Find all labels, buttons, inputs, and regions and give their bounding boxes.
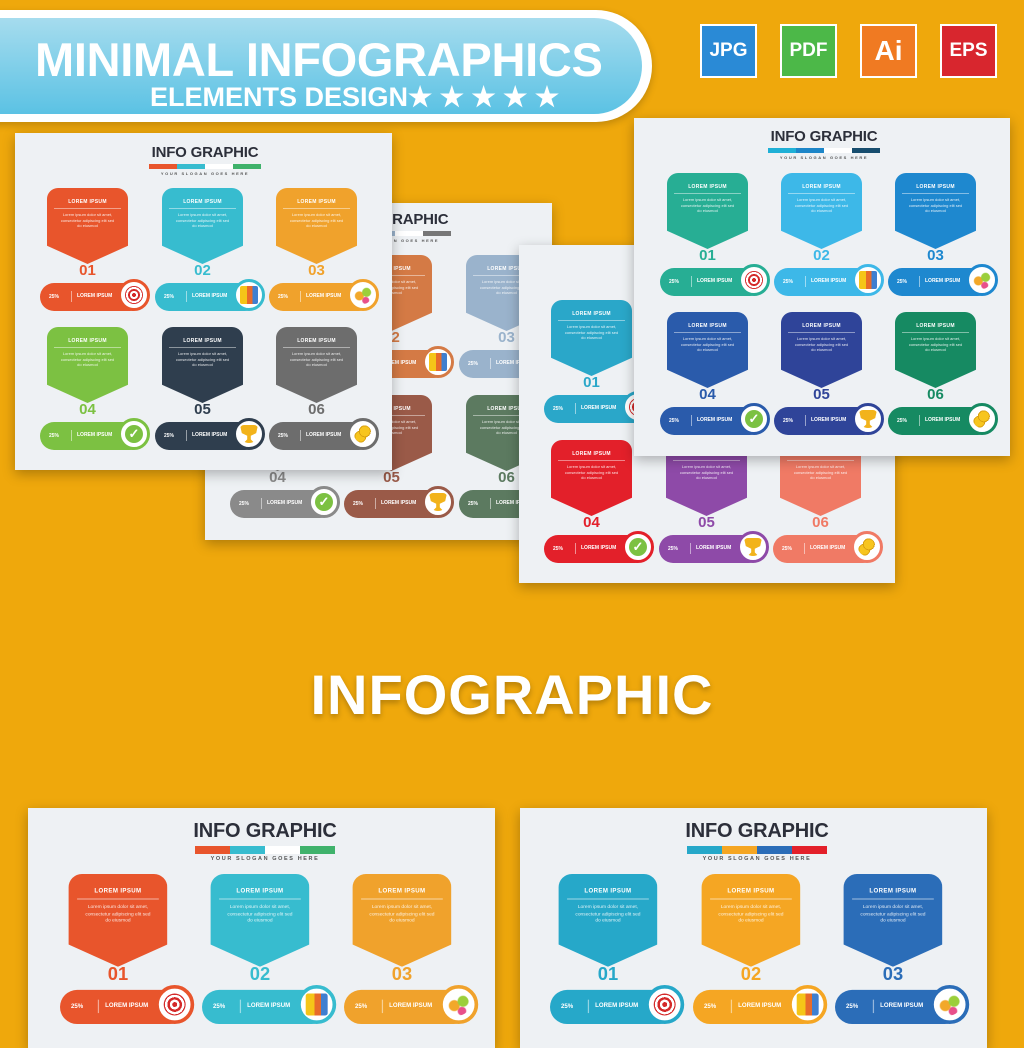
item A02: Lorem ipsum dolor sit amet, consectetur adipiscing elit sed do eiusmod bbox=[176, 212, 229, 228]
item B05: Lorem ipsum dolor sit amet, consectetur adipiscing elit sed do eiusmod bbox=[365, 419, 418, 435]
item F01: 01 bbox=[598, 964, 618, 985]
item A01: 01 bbox=[79, 262, 96, 279]
item A04: LOREM IPSUM bbox=[68, 338, 107, 344]
panel B title: INFO GRAPHIC bbox=[342, 211, 448, 228]
item C06: 06 bbox=[812, 514, 829, 531]
item A05: LOREM IPSUM bbox=[183, 338, 222, 344]
item D06: 25% bbox=[897, 418, 907, 424]
banner subtitle: ELEMENTS DESIGN★ ★ ★ ★ ★ bbox=[150, 82, 559, 112]
item D03: 25% bbox=[897, 279, 907, 285]
item F02: LOREM IPSUM bbox=[727, 887, 774, 895]
item C05: LOREM IPSUM bbox=[687, 451, 726, 457]
icon: Ai: Ai bbox=[874, 35, 902, 66]
item E02: 25% bbox=[213, 1003, 225, 1011]
middle heading: INFOGRAPHIC bbox=[310, 663, 714, 726]
item E03: LOREM IPSUM bbox=[389, 1002, 432, 1009]
item A01: LOREM IPSUM bbox=[77, 293, 112, 299]
item B04: LOREM IPSUM bbox=[258, 406, 297, 412]
banner inner bbox=[0, 18, 642, 114]
item D01: Lorem ipsum dolor sit amet, consectetur adipiscing elit sed do eiusmod bbox=[681, 197, 734, 213]
item A01 bbox=[40, 188, 150, 311]
panel D (front right) bbox=[634, 118, 1010, 456]
item A02: LOREM IPSUM bbox=[192, 293, 227, 299]
item B06: 06 bbox=[498, 469, 515, 486]
panel E title: YOUR SLOGAN GOES HERE bbox=[211, 856, 319, 862]
panel E title bbox=[193, 820, 337, 862]
item B02: LOREM IPSUM bbox=[372, 266, 411, 272]
item B02 bbox=[353, 255, 454, 378]
item E03: Lorem ipsum dolor sit amet, consectetur adipiscing elit sed do eiusmod bbox=[369, 903, 435, 923]
item E01: LOREM IPSUM bbox=[105, 1002, 148, 1009]
item A02: LOREM IPSUM bbox=[183, 199, 222, 205]
item A03: 03 bbox=[308, 262, 325, 279]
item D03 bbox=[888, 173, 998, 296]
item B01: 25% bbox=[239, 361, 249, 367]
item C04: LOREM IPSUM bbox=[572, 451, 611, 457]
item B03: 03 bbox=[498, 329, 515, 346]
panel D title: YOUR SLOGAN GOES HERE bbox=[780, 155, 868, 160]
item D04: ✓ bbox=[749, 411, 759, 426]
item A04: 04 bbox=[79, 401, 96, 418]
item C04: ✓ bbox=[633, 539, 643, 554]
item B03: LOREM IPSUM bbox=[496, 360, 531, 366]
icon: PDF: PDF bbox=[790, 40, 828, 61]
panel A title: INFO GRAPHIC bbox=[152, 144, 258, 161]
item D02: 25% bbox=[783, 279, 793, 285]
item F01: LOREM IPSUM bbox=[595, 1002, 638, 1009]
item B01: 01 bbox=[269, 329, 286, 346]
item C05: 25% bbox=[668, 546, 678, 552]
item E01: LOREM IPSUM bbox=[94, 887, 141, 895]
item D01: 01 bbox=[699, 247, 716, 264]
item A04: Lorem ipsum dolor sit amet, consectetur adipiscing elit sed do eiusmod bbox=[61, 351, 114, 367]
item F03: LOREM IPSUM bbox=[880, 1002, 923, 1009]
item A02 bbox=[155, 188, 265, 311]
item E02 bbox=[202, 874, 336, 1024]
item C06: 25% bbox=[782, 546, 792, 552]
item C01 bbox=[544, 300, 634, 423]
item C01: 25% bbox=[553, 406, 563, 412]
item C04 bbox=[544, 440, 654, 563]
item B06: Lorem ipsum dolor sit amet, consectetur adipiscing elit sed do eiusmod bbox=[480, 419, 533, 435]
item B05 bbox=[344, 395, 454, 518]
item A04: ✓ bbox=[129, 426, 139, 441]
item E03: 25% bbox=[355, 1003, 367, 1011]
item D02: 02 bbox=[813, 247, 830, 264]
item F02 bbox=[693, 874, 828, 1024]
item D02: Lorem ipsum dolor sit amet, consectetur adipiscing elit sed do eiusmod bbox=[795, 197, 848, 213]
item C06: LOREM IPSUM bbox=[801, 451, 840, 457]
item E01: 01 bbox=[108, 964, 128, 985]
item C04: 04 bbox=[583, 514, 600, 531]
item B06: 25% bbox=[468, 501, 478, 507]
item A06 bbox=[269, 327, 379, 450]
icon: Ai bbox=[860, 24, 917, 78]
item D01: LOREM IPSUM bbox=[697, 278, 732, 284]
item F02: Lorem ipsum dolor sit amet, consectetur adipiscing elit sed do eiusmod bbox=[718, 903, 784, 923]
item F03: 03 bbox=[883, 964, 903, 985]
item D05: LOREM IPSUM bbox=[802, 323, 841, 329]
item D01: LOREM IPSUM bbox=[688, 184, 727, 190]
item E03: 03 bbox=[392, 964, 412, 985]
panel D title: INFO GRAPHIC bbox=[771, 128, 877, 145]
item F03: LOREM IPSUM bbox=[869, 887, 916, 895]
item C01: 01 bbox=[583, 374, 600, 391]
icon: EPS: EPS bbox=[949, 40, 988, 61]
item E02: Lorem ipsum dolor sit amet, consectetur adipiscing elit sed do eiusmod bbox=[227, 903, 293, 923]
panel F title: INFO GRAPHIC bbox=[685, 820, 829, 842]
item B04: 25% bbox=[239, 501, 249, 507]
item C06: Lorem ipsum dolor sit amet, consectetur adipiscing elit sed do eiusmod bbox=[794, 464, 847, 480]
item B02: 02 bbox=[383, 329, 400, 346]
item C01: Lorem ipsum dolor sit amet, consectetur adipiscing elit sed do eiusmod bbox=[565, 324, 618, 340]
item A03: Lorem ipsum dolor sit amet, consectetur adipiscing elit sed do eiusmod bbox=[290, 212, 343, 228]
header banner bbox=[0, 10, 652, 122]
item B06 bbox=[459, 395, 531, 518]
item A04: 25% bbox=[49, 433, 59, 439]
item C04: 25% bbox=[553, 546, 563, 552]
item E03: LOREM IPSUM bbox=[378, 887, 425, 895]
item D05 bbox=[774, 312, 884, 435]
item B03 bbox=[459, 255, 531, 378]
item D06: LOREM IPSUM bbox=[925, 417, 960, 423]
item B05: LOREM IPSUM bbox=[381, 500, 416, 506]
item A05: Lorem ipsum dolor sit amet, consectetur adipiscing elit sed do eiusmod bbox=[176, 351, 229, 367]
item B06: LOREM IPSUM bbox=[496, 500, 531, 506]
item F02: 02 bbox=[741, 964, 761, 985]
item A06: LOREM IPSUM bbox=[297, 338, 336, 344]
item E02: LOREM IPSUM bbox=[236, 887, 283, 895]
item B04: 04 bbox=[269, 469, 286, 486]
item B04: LOREM IPSUM bbox=[267, 500, 302, 506]
item B02: LOREM IPSUM bbox=[381, 360, 416, 366]
panel B (back) bbox=[205, 203, 552, 540]
icon: JPG bbox=[700, 24, 757, 78]
item A04: LOREM IPSUM bbox=[77, 432, 112, 438]
item B02: 25% bbox=[353, 361, 363, 367]
item B01 bbox=[230, 255, 342, 381]
item E01: 25% bbox=[71, 1003, 83, 1011]
panel A title: YOUR SLOGAN GOES HERE bbox=[161, 171, 249, 176]
item D04: 25% bbox=[669, 418, 679, 424]
item F01: LOREM IPSUM bbox=[584, 887, 631, 895]
item F03: 25% bbox=[846, 1003, 858, 1011]
item B01: LOREM IPSUM bbox=[258, 266, 297, 272]
item A06: Lorem ipsum dolor sit amet, consectetur adipiscing elit sed do eiusmod bbox=[290, 351, 343, 367]
item B03: LOREM IPSUM bbox=[487, 266, 526, 272]
item F02: LOREM IPSUM bbox=[738, 1002, 781, 1009]
banner title: MINIMAL INFOGRAPHICS bbox=[35, 33, 603, 86]
item D06: 06 bbox=[927, 386, 944, 403]
item D02: LOREM IPSUM bbox=[802, 184, 841, 190]
item D05: LOREM IPSUM bbox=[811, 417, 846, 423]
item D01: 25% bbox=[669, 279, 679, 285]
item A02: 25% bbox=[164, 294, 174, 300]
panel F title bbox=[685, 820, 829, 862]
item D03: LOREM IPSUM bbox=[916, 184, 955, 190]
item A06: 25% bbox=[278, 433, 288, 439]
item D04: LOREM IPSUM bbox=[688, 323, 727, 329]
item F01: 25% bbox=[561, 1003, 573, 1011]
panel B title bbox=[342, 211, 451, 243]
item B03: 25% bbox=[468, 361, 478, 367]
panel A title bbox=[149, 144, 261, 176]
item D05: 25% bbox=[783, 418, 793, 424]
icon: PDF bbox=[780, 24, 837, 78]
item D06: Lorem ipsum dolor sit amet, consectetur adipiscing elit sed do eiusmod bbox=[909, 336, 962, 352]
item D02: LOREM IPSUM bbox=[811, 278, 846, 284]
item A01: 25% bbox=[49, 294, 59, 300]
item A02: 02 bbox=[194, 262, 211, 279]
item D01 bbox=[660, 173, 770, 296]
item B06: LOREM IPSUM bbox=[487, 406, 526, 412]
panel E title: INFO GRAPHIC bbox=[193, 820, 337, 842]
item D04: 04 bbox=[699, 386, 716, 403]
item B05: 25% bbox=[353, 501, 363, 507]
item A05: 05 bbox=[194, 401, 211, 418]
item F03: Lorem ipsum dolor sit amet, consectetur adipiscing elit sed do eiusmod bbox=[860, 903, 926, 923]
panel F title: YOUR SLOGAN GOES HERE bbox=[703, 856, 811, 862]
item F01: Lorem ipsum dolor sit amet, consectetur adipiscing elit sed do eiusmod bbox=[575, 903, 641, 923]
item E01: Lorem ipsum dolor sit amet, consectetur adipiscing elit sed do eiusmod bbox=[85, 903, 151, 923]
item A05: 25% bbox=[164, 433, 174, 439]
item F03 bbox=[835, 874, 970, 1024]
item A06: LOREM IPSUM bbox=[306, 432, 341, 438]
panel E (bottom left) bbox=[28, 808, 495, 1048]
item B02: Lorem ipsum dolor sit amet, consectetur adipiscing elit sed do eiusmod bbox=[365, 279, 418, 295]
item D02 bbox=[774, 173, 884, 296]
item E01 bbox=[60, 874, 194, 1024]
item C06 bbox=[773, 456, 883, 563]
item E02: 02 bbox=[250, 964, 270, 985]
item C05 bbox=[659, 456, 769, 563]
item D04 bbox=[660, 312, 770, 435]
item B05: 05 bbox=[383, 469, 400, 486]
item A01: Lorem ipsum dolor sit amet, consectetur adipiscing elit sed do eiusmod bbox=[61, 212, 114, 228]
item C06: LOREM IPSUM bbox=[810, 545, 845, 551]
icon: EPS bbox=[940, 24, 997, 78]
item B04: ✓ bbox=[319, 494, 329, 509]
item D06: LOREM IPSUM bbox=[916, 323, 955, 329]
item C01: LOREM IPSUM bbox=[572, 311, 611, 317]
item C01: LOREM IPSUM bbox=[581, 405, 616, 411]
item C04: Lorem ipsum dolor sit amet, consectetur adipiscing elit sed do eiusmod bbox=[565, 464, 618, 480]
item F01 bbox=[550, 874, 684, 1024]
item D05: 05 bbox=[813, 386, 830, 403]
item D04: Lorem ipsum dolor sit amet, consectetur adipiscing elit sed do eiusmod bbox=[681, 336, 734, 352]
item D03: 03 bbox=[927, 247, 944, 264]
item B01: Lorem ipsum dolor sit amet, consectetur adipiscing elit sed do eiusmod bbox=[251, 279, 304, 295]
item B05: LOREM IPSUM bbox=[372, 406, 411, 412]
item D04: LOREM IPSUM bbox=[697, 417, 732, 423]
item D03: Lorem ipsum dolor sit amet, consectetur adipiscing elit sed do eiusmod bbox=[909, 197, 962, 213]
item C05: LOREM IPSUM bbox=[696, 545, 731, 551]
item A05 bbox=[155, 327, 265, 450]
item A03: LOREM IPSUM bbox=[297, 199, 336, 205]
item D03: LOREM IPSUM bbox=[925, 278, 960, 284]
item A01: LOREM IPSUM bbox=[68, 199, 107, 205]
item E03 bbox=[344, 874, 478, 1024]
item A03: LOREM IPSUM bbox=[306, 293, 341, 299]
item A05: LOREM IPSUM bbox=[192, 432, 227, 438]
panel B title: YOUR SLOGAN GOES HERE bbox=[351, 238, 439, 243]
item A06: 06 bbox=[308, 401, 325, 418]
panel C (back) bbox=[519, 245, 895, 583]
icon: JPG: JPG bbox=[709, 40, 748, 61]
item D05: Lorem ipsum dolor sit amet, consectetur adipiscing elit sed do eiusmod bbox=[795, 336, 848, 352]
panel A (front left) bbox=[15, 133, 392, 470]
item A03: 25% bbox=[278, 294, 288, 300]
item A04 bbox=[40, 327, 150, 450]
panel D title bbox=[768, 128, 880, 160]
item A03 bbox=[269, 188, 379, 311]
item B03: Lorem ipsum dolor sit amet, consectetur adipiscing elit sed do eiusmod bbox=[480, 279, 533, 295]
item D06 bbox=[888, 312, 998, 435]
item B04 bbox=[230, 469, 340, 518]
item C04: LOREM IPSUM bbox=[581, 545, 616, 551]
item C05: Lorem ipsum dolor sit amet, consectetur adipiscing elit sed do eiusmod bbox=[680, 464, 733, 480]
item F02: 25% bbox=[704, 1003, 716, 1011]
item B04: Lorem ipsum dolor sit amet, consectetur adipiscing elit sed do eiusmod bbox=[251, 419, 304, 435]
panel F (bottom right) bbox=[520, 808, 987, 1048]
item E02: LOREM IPSUM bbox=[247, 1002, 290, 1009]
item C05: 05 bbox=[698, 514, 715, 531]
item B01: LOREM IPSUM bbox=[267, 360, 302, 366]
